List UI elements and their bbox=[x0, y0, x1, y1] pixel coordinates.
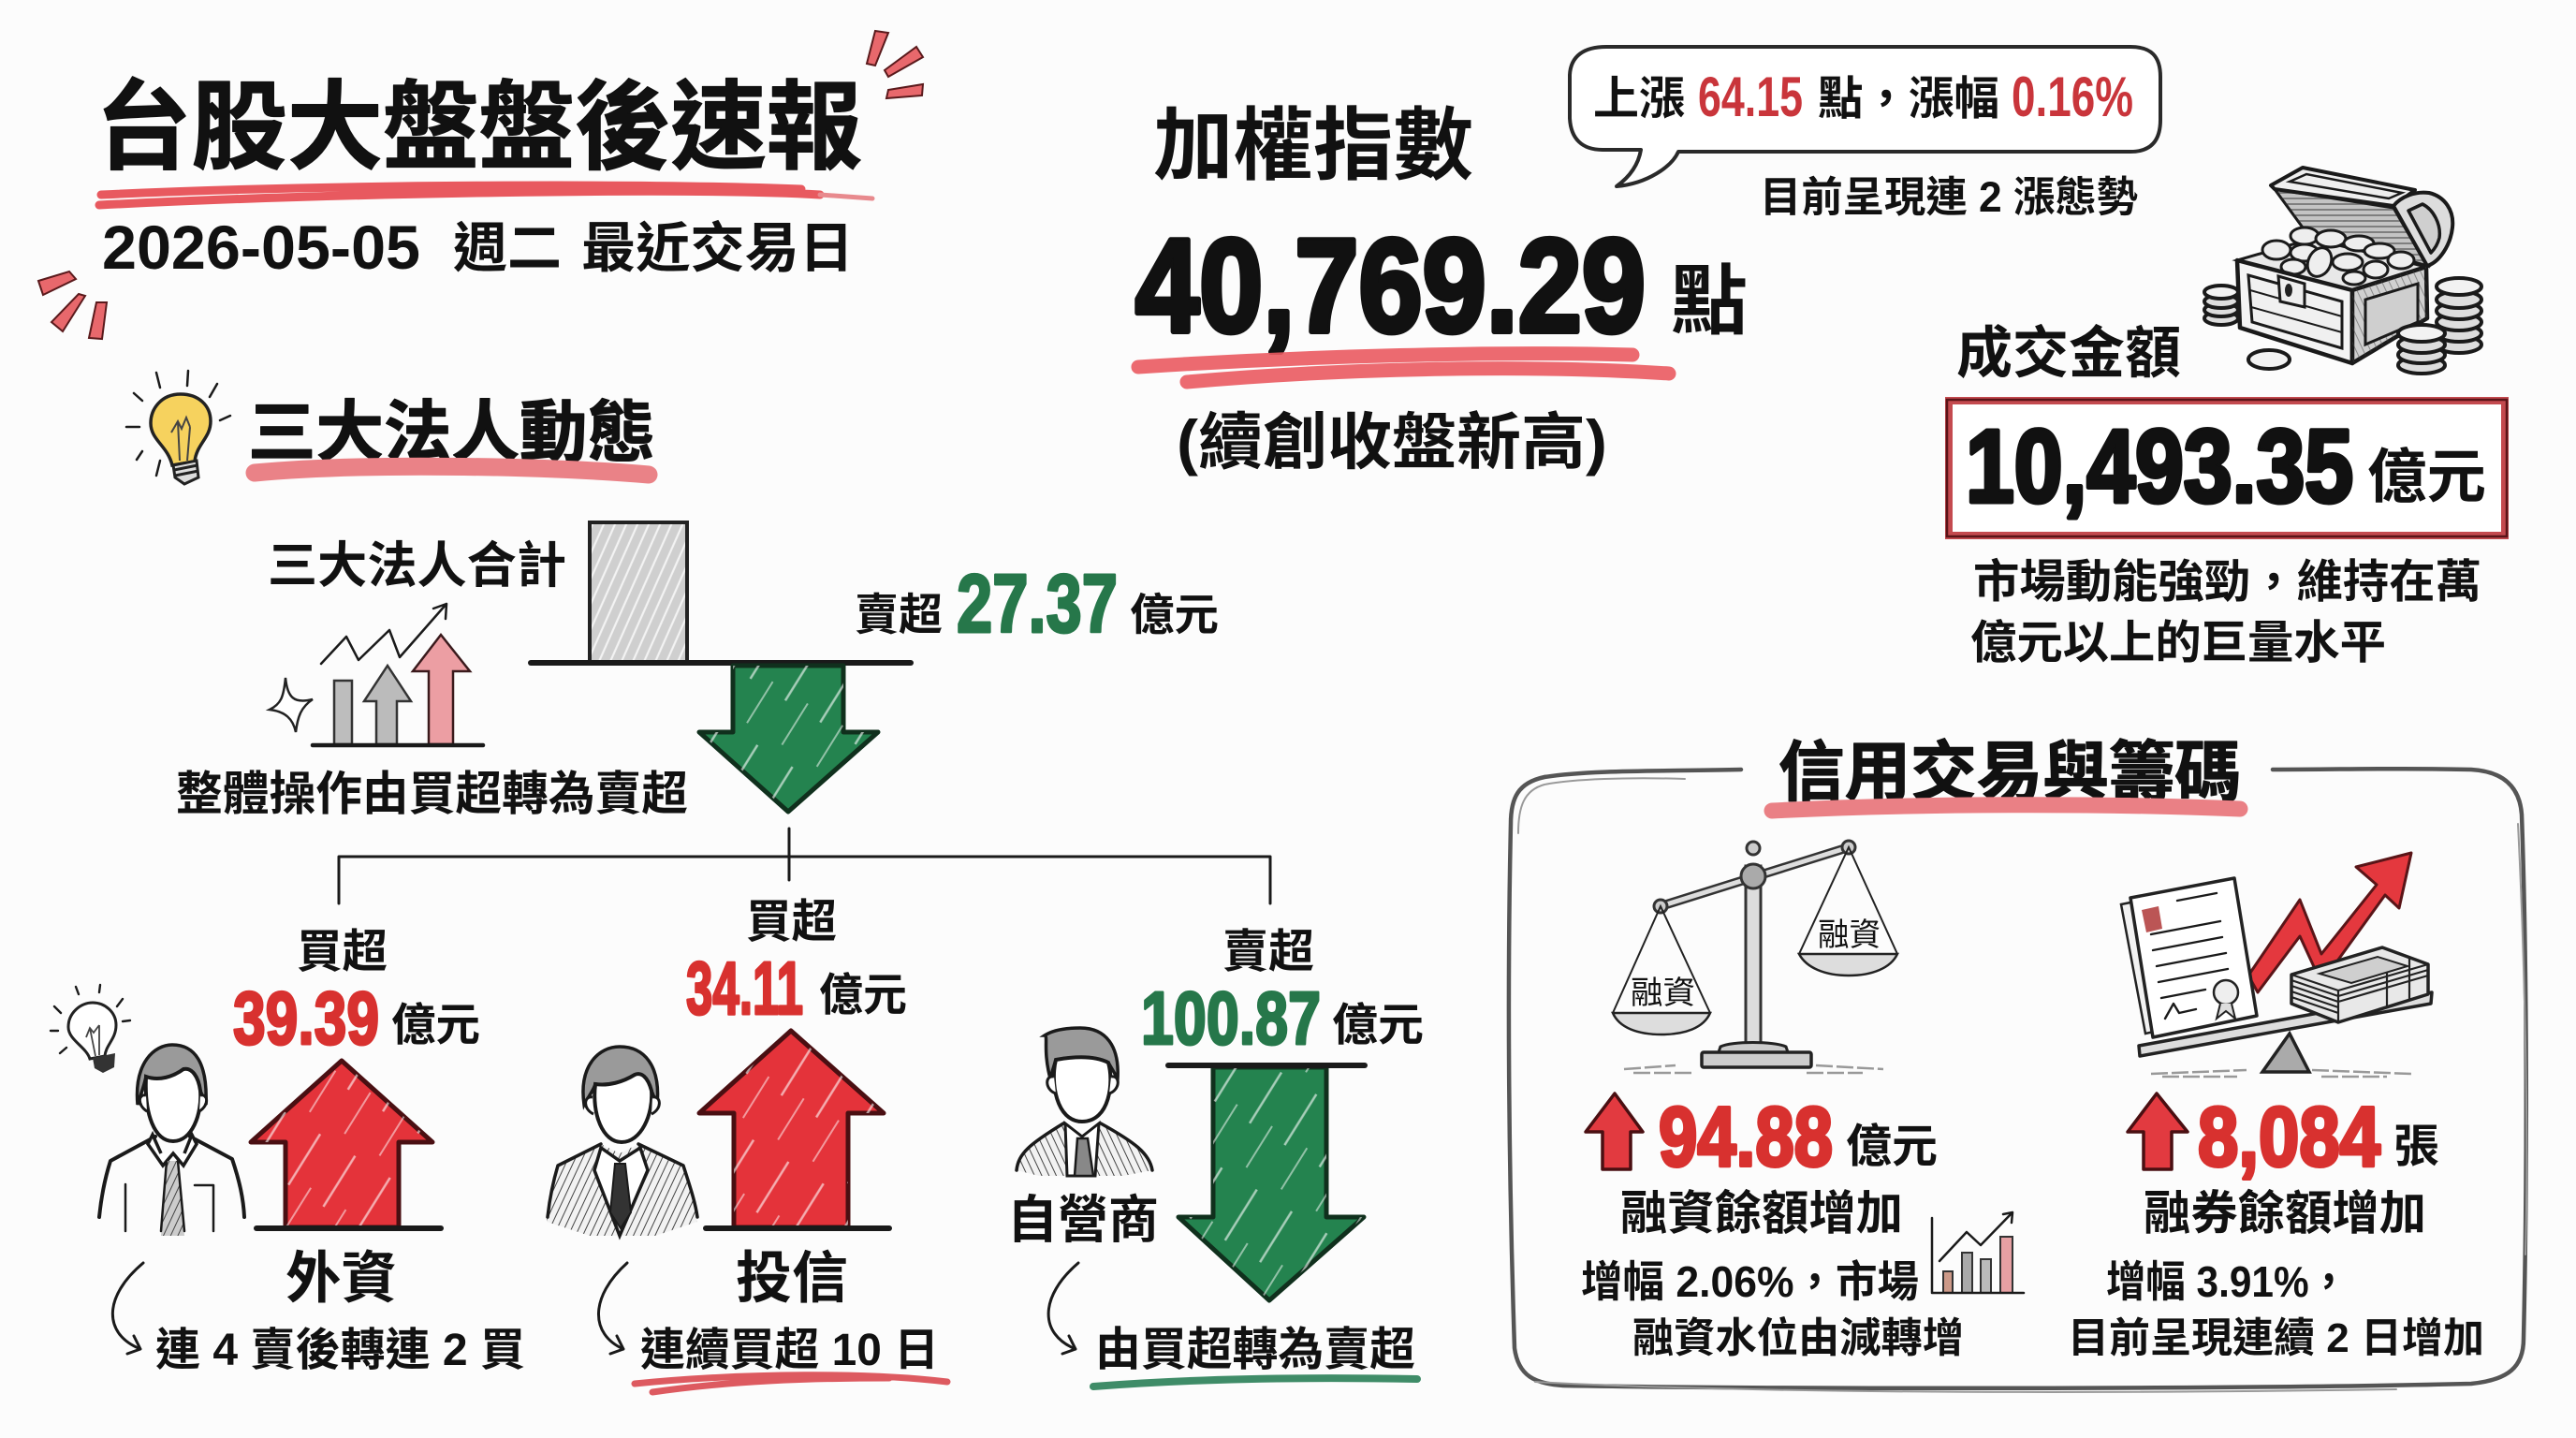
unit: 張 bbox=[2393, 1122, 2439, 1172]
green underline bbox=[1093, 1378, 1417, 1387]
chart icon: rising bars and arrows bbox=[270, 604, 483, 745]
name: 投信 bbox=[736, 1247, 848, 1310]
coin pile bbox=[2237, 239, 2426, 290]
total green down arrow bbox=[699, 666, 878, 812]
red up arrow bbox=[699, 1031, 889, 1228]
unit: 億元 bbox=[391, 1001, 480, 1050]
panel border bbox=[1509, 769, 2526, 1392]
lid interior bbox=[2275, 189, 2427, 266]
panel heading: 信用交易與籌碼 bbox=[1778, 736, 2241, 809]
coin stacks bbox=[2204, 278, 2481, 374]
green down arrow bbox=[1168, 1065, 1365, 1300]
heading underline bbox=[255, 466, 649, 475]
icon: treasure chest bbox=[2204, 168, 2481, 374]
date line bbox=[102, 213, 854, 282]
label: 融資餘額增加 bbox=[1620, 1187, 1903, 1240]
column: dealers bbox=[1007, 927, 1424, 1387]
column: investment trust bbox=[547, 897, 947, 1392]
burst marks bottom left bbox=[38, 271, 107, 339]
left pan label: 融資 bbox=[1631, 976, 1695, 1011]
summary text: 整體操作由買超轉為賣超 bbox=[176, 768, 688, 820]
streak note: 目前呈現連 2 漲態勢 bbox=[1760, 173, 2138, 221]
lid top bbox=[2271, 168, 2415, 206]
heading: index: 加權指數 bbox=[1153, 102, 1473, 191]
note line 1: 增幅 3.91%， bbox=[2106, 1257, 2349, 1306]
date line: 最近交易日 bbox=[581, 218, 854, 279]
chest body bbox=[2237, 260, 2352, 363]
date line: 週二 bbox=[453, 218, 562, 279]
base line bbox=[313, 743, 483, 747]
curved arrow bbox=[1048, 1263, 1078, 1354]
stat: margin balance bbox=[1581, 1091, 2024, 1361]
red small arrow bbox=[1586, 1093, 1643, 1169]
note line 1: 增幅 2.06%，市場 bbox=[1581, 1257, 1919, 1306]
title underline bbox=[99, 185, 820, 205]
speech bubble bbox=[1570, 47, 2160, 186]
right pan bbox=[1799, 847, 1897, 954]
change text: 上漲 bbox=[1593, 74, 1685, 125]
note: 億元以上的巨量水平 bbox=[1970, 618, 2386, 668]
total net sell value: 27.37 bbox=[957, 557, 1118, 650]
note: 市場動能強勁，維持在萬 bbox=[1973, 557, 2481, 608]
value: 8,084 bbox=[2198, 1091, 2380, 1184]
lid end cap bbox=[2393, 193, 2452, 266]
curved arrow bbox=[112, 1263, 143, 1354]
icon: balance scale bbox=[1613, 841, 1897, 1073]
date line: 2026-05-05 bbox=[102, 213, 420, 282]
note bbox=[1970, 557, 2481, 668]
value: 39.39 bbox=[233, 976, 379, 1060]
small bar chart icon bbox=[1932, 1212, 2024, 1293]
sparkle bbox=[270, 678, 313, 732]
burst marks top right bbox=[867, 31, 923, 98]
index value: 40,769.29 bbox=[1135, 212, 1646, 360]
note line 2: 融資水位由減轉增 bbox=[1632, 1315, 1964, 1361]
gray arrow bbox=[364, 666, 411, 744]
heading: turnover: 成交金額 bbox=[1956, 322, 2181, 385]
note: 連續買超 10 日 bbox=[640, 1326, 939, 1375]
note line 2: 目前呈現連續 2 日增加 bbox=[2068, 1315, 2484, 1361]
gray bar bbox=[334, 681, 352, 744]
change text: 64.15 bbox=[1698, 66, 1803, 128]
stat: short balance bbox=[2068, 1091, 2484, 1361]
change text bbox=[1593, 66, 2133, 128]
name: 自營商 bbox=[1007, 1191, 1159, 1249]
title underline tail bbox=[820, 195, 872, 198]
icon: document, money and rising arrow on a seesaw bbox=[2121, 853, 2432, 1077]
unit: 點 bbox=[1671, 259, 1748, 345]
value: 94.88 bbox=[1659, 1091, 1833, 1184]
value: 34.11 bbox=[686, 946, 803, 1030]
index underline bbox=[1138, 354, 1669, 382]
unit: 億元 bbox=[1846, 1122, 1938, 1172]
total net sell value bbox=[855, 557, 1219, 650]
person: dealer bbox=[1017, 1028, 1152, 1176]
tree connector bbox=[339, 829, 1270, 903]
title: 台股大盤盤後速報 bbox=[95, 74, 862, 183]
red underline bbox=[635, 1375, 947, 1392]
section: index bbox=[1135, 102, 1748, 477]
label: buy: 買超 bbox=[297, 927, 388, 977]
label: buy: 買超 bbox=[746, 897, 837, 947]
label: 融券餘額增加 bbox=[2144, 1187, 2426, 1240]
label: sell: 賣超 bbox=[1222, 927, 1314, 977]
curved arrow bbox=[598, 1263, 627, 1354]
unit: 億元 bbox=[1332, 1001, 1424, 1050]
money stack bbox=[2291, 947, 2428, 1022]
gray bar bbox=[590, 522, 687, 663]
note: record high: (續創收盤新高) bbox=[1177, 407, 1607, 477]
section: institutional investors bbox=[51, 371, 1424, 1392]
red up arrow bbox=[251, 1061, 441, 1228]
red small arrow bbox=[2128, 1093, 2188, 1169]
pink arrow bbox=[413, 635, 470, 744]
left pan bbox=[1613, 906, 1710, 1034]
total net sell value: 賣超 bbox=[855, 590, 943, 639]
callout: change bbox=[1570, 47, 2160, 221]
icon: yellow light bulb bbox=[126, 371, 230, 484]
heading: institutional: 三大法人動態 bbox=[248, 396, 655, 471]
heading underline bbox=[1772, 805, 2240, 811]
value: 10,493.35 bbox=[1966, 409, 2353, 524]
panel: margin and chips bbox=[1509, 736, 2526, 1392]
section: turnover bbox=[1947, 168, 2507, 668]
unit: 億元 bbox=[819, 971, 907, 1020]
value box bbox=[1947, 400, 2507, 536]
column: foreign investors bbox=[51, 927, 525, 1375]
trend line bbox=[321, 604, 446, 664]
note: 由買超轉為賣超 bbox=[1095, 1325, 1415, 1375]
icon: outline bulb bbox=[51, 985, 130, 1073]
right pan label: 融資 bbox=[1818, 917, 1881, 953]
label: combined: 三大法人合計 bbox=[268, 538, 566, 594]
note: 連 4 賣後轉連 2 買 bbox=[155, 1326, 525, 1375]
zero line bbox=[531, 660, 911, 666]
name: 外資 bbox=[285, 1247, 397, 1310]
header block bbox=[38, 31, 923, 339]
change text: 點，漲幅 bbox=[1818, 74, 1999, 125]
unit: 億元 bbox=[2367, 445, 2486, 510]
person: investment trust bbox=[547, 1047, 697, 1236]
change text: 0.16% bbox=[2012, 66, 2133, 128]
total net sell value: 億元 bbox=[1130, 590, 1219, 639]
value: 100.87 bbox=[1141, 976, 1321, 1060]
person: foreign investor bbox=[99, 1045, 244, 1236]
